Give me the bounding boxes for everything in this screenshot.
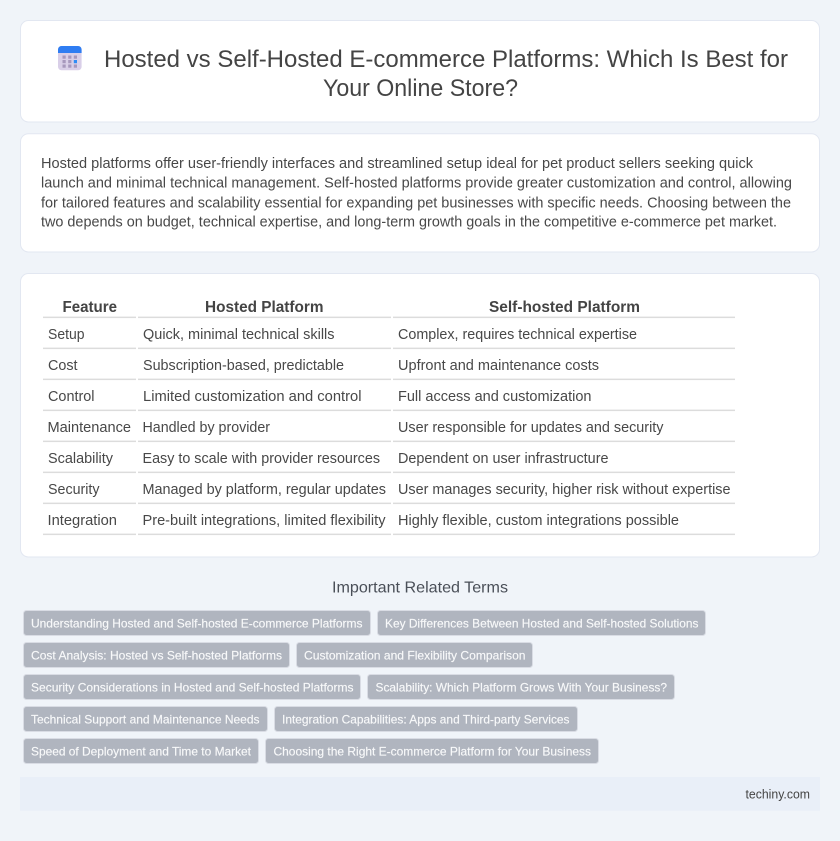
chip: [24, 610, 370, 636]
panel: comparison table: [20, 274, 820, 557]
table column: feature: Setup: [48, 327, 84, 343]
table column: self-hosted platform: Upfront and maintenance costs: [398, 358, 599, 374]
table column: self-hosted platform: User manages security, higher risk without expertise: [398, 482, 730, 498]
chip: [266, 738, 598, 764]
panel: title card: [20, 20, 820, 122]
table header: Feature: [62, 299, 117, 316]
footer: [20, 777, 820, 811]
table column: hosted platform: Handled by provider: [142, 420, 270, 436]
table column: feature: Maintenance: [48, 420, 131, 436]
title: Your Online Store?: [323, 75, 518, 102]
table column: feature: Security: [48, 482, 100, 498]
chip: Speed of Deployment and Time to Market: [31, 744, 252, 758]
chip: Cost Analysis: Hosted vs Self-hosted Platforms: [31, 648, 282, 662]
chip: Key Differences Between Hosted and Self-hosted Solutions: [385, 616, 698, 630]
chip: Understanding Hosted and Self-hosted E-commerce Platforms: [31, 616, 362, 630]
related terms chips: [24, 610, 706, 764]
table column: self-hosted platform: User responsible for updates and security: [398, 420, 664, 436]
table column: self-hosted platform: Highly flexible, custom integrations possible: [398, 513, 679, 529]
chip: Security Considerations in Hosted and Self-hosted Platforms: [31, 680, 354, 694]
title: Hosted vs Self-Hosted E-commerce Platforms: Which Is Best for: [104, 46, 788, 73]
table column: hosted platform: Subscription-based, predictable: [143, 358, 344, 374]
table header: [62, 299, 640, 316]
text block: introduction paragraph: for tailored features and scalability essential for expanding pet businesses with specific needs. Choosing between the: [41, 196, 791, 212]
title: [104, 46, 788, 102]
icon: calendar: [58, 46, 82, 70]
text block: introduction paragraph: two depends on budget, technical expertise, and long-term growth goals in the competitive e-commerce pet market.: [41, 214, 777, 230]
table column: hosted platform: Pre-built integrations, limited flexibility: [142, 513, 386, 529]
footer source text: techiny.com: [746, 786, 810, 801]
chip: [24, 642, 290, 668]
chip: Customization and Flexibility Comparison: [304, 648, 526, 662]
chip: Choosing the Right E-commerce Platform for Your Business: [274, 744, 591, 758]
text block: introduction paragraph: [41, 156, 792, 230]
table column: self-hosted platform: [398, 327, 730, 529]
table column: hosted platform: Limited customization and control: [143, 389, 362, 405]
table column: self-hosted platform: Dependent on user infrastructure: [398, 451, 608, 467]
table column: feature: Cost: [48, 358, 78, 374]
text block: introduction paragraph: Hosted platforms offer user-friendly interfaces and streamlined setup ideal for pet product sellers seeking quick: [41, 156, 754, 172]
table column: self-hosted platform: Full access and customization: [398, 389, 592, 405]
heading: important related terms: Important Related Terms: [332, 580, 508, 597]
chip: [378, 610, 706, 636]
chip: [368, 674, 674, 700]
table header: Self-hosted Platform: [489, 299, 640, 316]
chip: Technical Support and Maintenance Needs: [31, 712, 260, 726]
table column: hosted platform: Quick, minimal technical skills: [143, 327, 334, 343]
chip: [296, 642, 532, 668]
panel: introduction: [20, 134, 820, 252]
table column: feature: Scalability: [48, 451, 114, 467]
chip: [24, 674, 360, 700]
text block: introduction paragraph: launch and minimal technical management. Self-hosted platforms provide greater customization and control, allowing: [41, 176, 792, 192]
table column: feature: Control: [48, 389, 94, 405]
table column: feature: Integration: [48, 513, 117, 529]
chip: [24, 738, 258, 764]
table row lines: [43, 317, 735, 535]
chip: [24, 706, 268, 732]
chip: Integration Capabilities: Apps and Third-party Services: [282, 712, 570, 726]
table column: hosted platform: Easy to scale with provider resources: [142, 451, 380, 467]
chip: [274, 706, 578, 732]
table column: self-hosted platform: Complex, requires technical expertise: [398, 327, 637, 343]
table column: hosted platform: Managed by platform, regular updates: [142, 482, 386, 498]
table column: hosted platform: [142, 327, 386, 529]
table column: feature: [48, 327, 131, 529]
chip: Scalability: Which Platform Grows With Your Business?: [376, 680, 667, 694]
table header: Hosted Platform: [205, 299, 324, 316]
